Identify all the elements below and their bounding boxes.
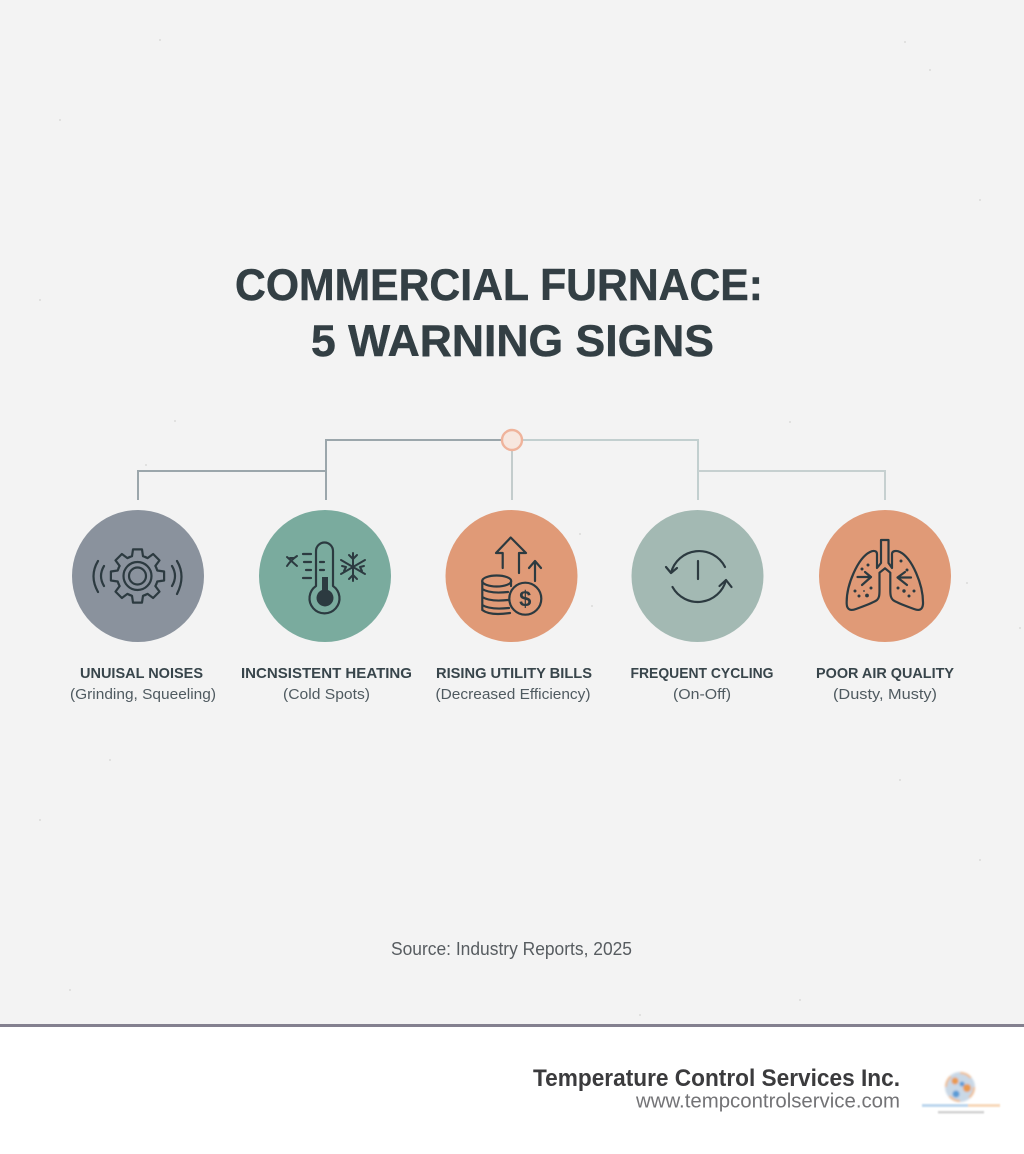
logo — [922, 1072, 1000, 1114]
label: RISING UTILITY BILLS — [436, 666, 592, 682]
icon: gear with sound waves — [94, 549, 182, 603]
website: www.tempcontrolservice.com — [635, 1090, 900, 1112]
sign 5: poor air quality — [816, 510, 954, 703]
label: POOR AIR QUALITY — [816, 666, 954, 682]
label: INCNSISTENT HEATING — [241, 666, 412, 682]
connector node — [502, 430, 522, 450]
label: UNUISAL NOISES — [80, 666, 203, 682]
title — [235, 261, 763, 366]
source note: Source: Industry Reports, 2025 — [391, 939, 632, 959]
sign 2: inconsistent heating — [241, 510, 412, 703]
sign 4: frequent cycling — [630, 510, 774, 703]
connector tree — [138, 430, 885, 500]
icon: lungs — [847, 540, 923, 610]
icon: cycle arrows — [666, 551, 732, 602]
sign 1: unusual noises — [70, 510, 216, 703]
title: COMMERCIAL FURNACE: — [235, 261, 763, 310]
sign 5: poor air quality: (Dusty, Musty) — [833, 686, 937, 703]
sign 4: frequent cycling: (On-Off) — [673, 686, 731, 703]
company name: Temperature Control Services Inc. — [533, 1065, 900, 1092]
icon: thermometer with snowflake — [287, 542, 365, 613]
label: FREQUENT CYCLING — [630, 666, 774, 682]
sign 3: rising utility bills: $ — [519, 586, 531, 612]
sign 1: unusual noises: (Grinding, Squeeling) — [70, 686, 216, 703]
sign 2: inconsistent heating: (Cold Spots) — [283, 686, 370, 703]
sign 3: rising utility bills — [436, 510, 592, 703]
title: 5 WARNING SIGNS — [311, 317, 714, 366]
sign 3: rising utility bills: (Decreased Efficiency) — [436, 686, 590, 703]
icon: coins and rising arrows — [482, 538, 541, 615]
footer band — [0, 1024, 1024, 1154]
